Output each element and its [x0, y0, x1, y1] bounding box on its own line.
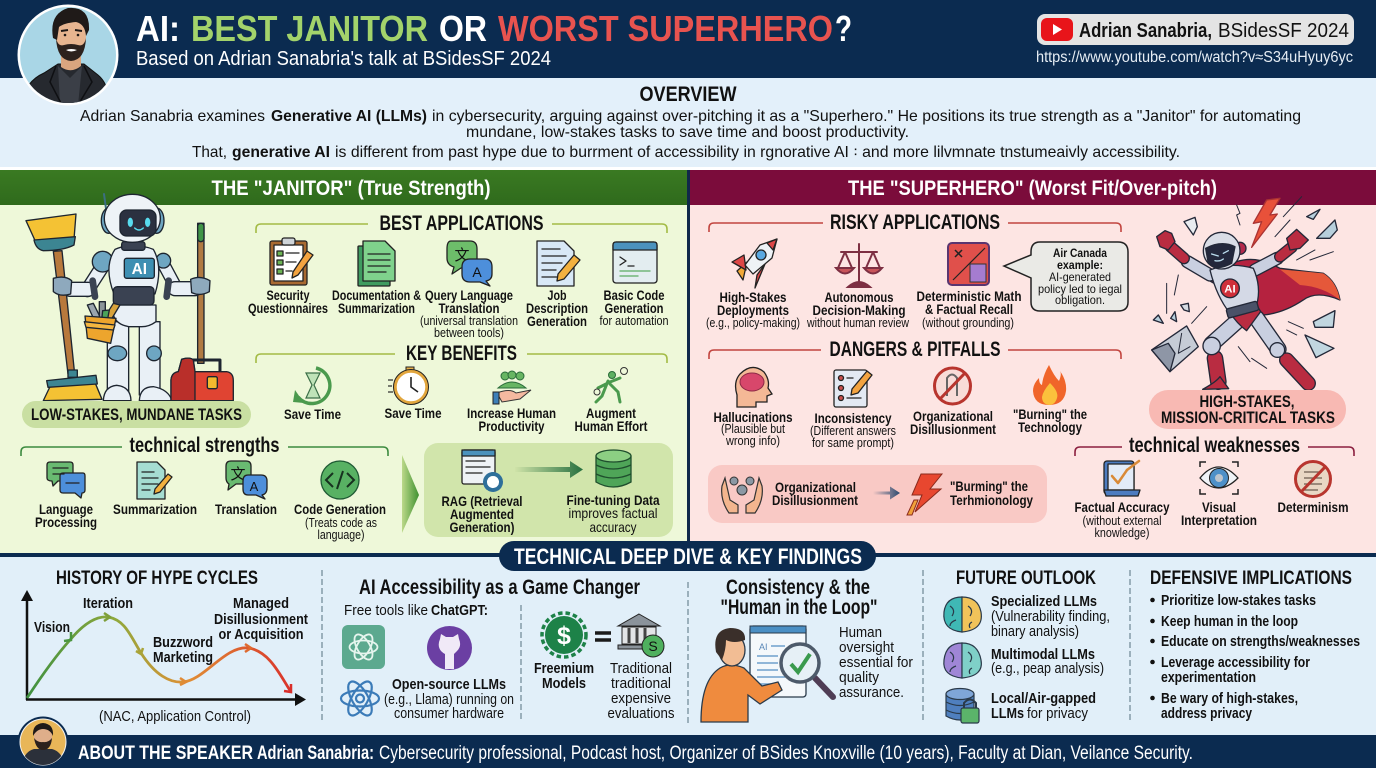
text: traditional evaluations: Traditional	[610, 660, 672, 677]
footer: about the speaker: Adrian Sanabria:	[257, 743, 374, 764]
text: burning terminology: Terhmionology	[950, 492, 1033, 508]
danger: inconsistency: Inconsistency	[814, 410, 892, 426]
item: query language translation: Translation	[438, 300, 500, 316]
panel: superhero	[688, 170, 1376, 555]
weakness: visual interpretation: Interpretation	[1181, 512, 1257, 528]
chart labels: Buzzword	[153, 634, 213, 651]
left and right arms	[53, 251, 210, 297]
superhero header	[688, 170, 1376, 205]
list: defensive implications	[1150, 592, 1360, 722]
mop stick	[198, 223, 204, 363]
item: query language translation: between tools)	[434, 326, 504, 340]
head	[101, 194, 164, 242]
item: documentation: Documentation &	[332, 287, 421, 303]
header band	[0, 0, 1376, 78]
list: defensive implications: experimentation	[1161, 669, 1256, 686]
overview text: Generative AI (LLMs)	[271, 108, 427, 125]
heading: technical weaknesses: technical weaknesses	[1129, 434, 1300, 457]
heading: AI accessibility: AI Accessibility as a Game Changer	[359, 576, 640, 599]
panel: technical deep dive	[0, 553, 1376, 736]
text: multimodal LLMs: Multimodal LLMs	[991, 646, 1095, 663]
text: human oversight: quality	[839, 669, 879, 686]
danger: hallucinations	[714, 367, 793, 448]
benefit: save time stopwatch: Save Time	[384, 405, 442, 421]
text: fine-tuning: Fine-tuning Data	[566, 492, 660, 508]
text: fine-tuning	[566, 492, 660, 535]
benefit: increase human productivity: Productivity	[478, 418, 545, 434]
video url: https://www.youtube.com/watch?v≈S34uHyuy6yc	[1036, 49, 1353, 66]
list: defensive implications: address privacy	[1161, 705, 1253, 722]
text: specialized LLMs: (Vulnerability finding,	[991, 608, 1110, 625]
strength: language processing: Language	[39, 501, 93, 517]
strength: language processing	[35, 462, 97, 530]
avatar: speaker in header	[18, 4, 118, 106]
item: job description generation: Description	[526, 300, 588, 316]
text: local LLMs: Local/Air-gapped	[991, 690, 1096, 707]
text: RAG: Generation)	[450, 519, 514, 535]
icon: chatgpt	[342, 625, 385, 669]
subtitle: Based on Adrian Sanabria's talk at BSidesSF 2024	[136, 48, 551, 70]
column: consistency and human in the loop	[701, 576, 913, 722]
list: defensive implications: Prioritize low-stakes tasks	[1161, 592, 1316, 609]
title: OR	[439, 8, 487, 49]
heading: technical strengths: technical strengths	[130, 434, 280, 457]
overview heading: OVERVIEW	[640, 83, 737, 106]
strength: code generation	[294, 461, 386, 542]
icon: bank with coin	[618, 614, 664, 657]
tag: high-stakes: MISSION-CRITICAL TASKS	[1161, 409, 1335, 427]
item: security questionnaires: Questionnaires	[248, 300, 328, 316]
text: freemium models: Models	[542, 675, 586, 692]
risky: autonomous decision-making	[806, 244, 910, 330]
weakness: factual accuracy: knowledge)	[1094, 526, 1150, 540]
arrow: disillusionment to burning	[873, 486, 900, 500]
limbs	[1157, 229, 1308, 389]
item: basic code generation: for automation	[600, 314, 669, 328]
icon: multimodal brain	[944, 643, 981, 678]
risky: autonomous decision-making: Autonomous	[824, 289, 894, 305]
chart: hype cycle curve	[21, 590, 308, 725]
text: local LLMs: for privacy	[1027, 705, 1088, 722]
text: human oversight: assurance.	[839, 684, 904, 701]
panel: overview	[0, 78, 1376, 167]
chart labels: Disillusionment	[214, 611, 308, 628]
icon: github	[427, 626, 472, 670]
weakness: factual accuracy: Factual Accuracy	[1074, 499, 1170, 515]
heading: future outlook: FUTURE OUTLOOK	[956, 568, 1096, 589]
footer: about the speaker: Cybersecurity professional, Podcast host, Organizer of BSides Knoxville (10 years), Faculty at Dian, Veilance Security.	[379, 743, 1193, 764]
title: BEST JANITOR	[191, 8, 428, 49]
item: documentation: Summarization	[338, 300, 415, 316]
overview text: Adrian Sanabria examines	[80, 108, 265, 125]
weakness: determinism	[1278, 462, 1348, 515]
list: defensive implications: Be wary of high-stakes,	[1161, 690, 1298, 707]
torso	[1210, 265, 1261, 331]
heading: consistency: Consistency & the	[726, 576, 870, 599]
callout: air canada: AI-generated	[1049, 270, 1111, 284]
icon: hands and gears	[722, 477, 762, 513]
overview text	[80, 108, 1301, 161]
icon: database with lock	[946, 688, 979, 723]
text: traditional evaluations: evaluations	[608, 705, 674, 722]
text: free tools	[344, 602, 488, 619]
text: fine-tuning: accuracy	[590, 519, 636, 535]
heading: key benefits	[256, 342, 667, 365]
callout: air canada: policy led to iegal	[1038, 282, 1122, 296]
item: job description generation: Job	[548, 287, 566, 303]
callout: air canada: example:	[1057, 258, 1103, 272]
text: RAG	[442, 493, 522, 535]
risky: deterministic math: (without grounding)	[922, 316, 1014, 330]
item: job description generation: Generation	[527, 313, 587, 329]
heading: dangers	[709, 338, 1121, 361]
text: human oversight: oversight	[839, 639, 895, 656]
risky: autonomous decision-making: without human review	[806, 316, 910, 330]
heading: best applications: BEST APPLICATIONS	[380, 212, 544, 235]
text: burning terminology: "Burming" the	[950, 478, 1028, 494]
strength: code generation: (Treats code as	[305, 516, 377, 530]
danger: inconsistency	[810, 370, 896, 450]
risky: deterministic math	[916, 243, 1022, 330]
equals sign	[595, 633, 611, 640]
banner: technical deep dive: TECHNICAL DEEP DIVE & KEY FINDINGS	[514, 544, 862, 569]
heading: best applications	[256, 212, 667, 235]
icon: freemium badge: $	[557, 622, 571, 650]
danger: hallucinations: (Plausible but	[721, 422, 785, 436]
danger: burning technology: "Burning" the	[1013, 406, 1087, 422]
title	[136, 8, 852, 49]
chart labels	[34, 595, 308, 725]
footer: about the speaker: ABOUT THE SPEAKER	[78, 743, 253, 764]
illustration: human reviewing AI output: AI	[759, 642, 768, 652]
strength: translation	[215, 461, 277, 517]
column dividers	[322, 570, 1130, 723]
danger: burning technology: Technology	[1018, 419, 1082, 435]
overview text: is different from past hype due to burrment of accessibility in rgnorative AI ꞉ and more lilvmnate tnstumeaivly accessibility.	[335, 144, 1180, 161]
benefit: save time hourglass	[284, 368, 341, 422]
item: documentation	[332, 241, 421, 316]
text: local LLMs	[991, 690, 1096, 722]
list: defensive implications: Keep human in the loop	[1161, 613, 1298, 630]
text: organizational disillusionment: Organizational	[775, 479, 856, 495]
text: free tools: Free tools like	[344, 602, 428, 619]
head	[1203, 232, 1246, 269]
illustration: superhero robot	[1152, 197, 1340, 389]
danger: organizational disillusionment: Disillusionment	[910, 421, 996, 437]
overview text: mundane, low-stakes tasks to save time and boost productivity.	[466, 124, 909, 141]
item: security questionnaires	[248, 238, 328, 316]
benefit: save time stopwatch	[384, 367, 442, 421]
item: query language translation: (universal translation	[420, 314, 518, 328]
janitor header: THE "JANITOR" (True Strength)	[212, 177, 490, 200]
benefit: augment human effort: Human Effort	[574, 418, 648, 434]
danger: hallucinations: Hallucinations	[714, 409, 793, 425]
callout: air canada: obligation.	[1055, 293, 1105, 307]
video link badge: BSidesSF 2024	[1218, 20, 1349, 42]
tool pouch	[84, 302, 120, 343]
risky: high-stakes deployments: Deployments	[717, 302, 789, 318]
icon: database	[596, 450, 631, 487]
weakness: visual interpretation	[1181, 462, 1257, 528]
list: defensive implications: Leverage accessibility for	[1161, 654, 1310, 671]
text: specialized LLMs: binary analysis)	[991, 623, 1079, 640]
panel: disillusionment flow	[708, 465, 1047, 523]
danger: inconsistency: (Different answers	[810, 424, 896, 438]
superhero header: THE "SUPERHERO" (Worst Fit/Over-pitch)	[848, 177, 1217, 200]
danger: inconsistency: for same prompt)	[812, 436, 894, 450]
icon: lightning bolt	[907, 474, 942, 515]
text: free tools: ChatGPT:	[431, 602, 488, 619]
section: key benefits	[256, 342, 667, 434]
text: RAG: RAG (Retrieval	[442, 493, 522, 509]
item: query language translation: 文	[454, 244, 470, 265]
panel: janitor	[0, 170, 688, 555]
callout: air canada	[1004, 242, 1128, 311]
strength: summarization: Summarization	[113, 501, 197, 517]
banner: technical deep dive	[499, 541, 876, 571]
torso: AI	[132, 261, 147, 278]
icon: RAG window	[462, 450, 501, 490]
illustration: human reviewing AI output	[701, 626, 833, 722]
chart labels: Vision	[34, 619, 70, 636]
column: history of hype cycles	[21, 568, 308, 725]
legs	[103, 305, 172, 401]
avatar: speaker in footer	[18, 716, 68, 768]
text: open-source LLMs	[384, 676, 514, 722]
heading: risky applications	[709, 211, 1121, 234]
text: traditional evaluations: traditional	[611, 675, 671, 692]
risky: high-stakes deployments	[706, 239, 800, 330]
item: query language translation	[420, 241, 518, 340]
risky: deterministic math: Deterministic Math	[916, 288, 1022, 304]
text: organizational disillusionment	[772, 479, 858, 508]
icon: atom	[341, 678, 379, 719]
heading: key benefits: KEY BENEFITS	[406, 342, 517, 365]
chart labels: Managed	[233, 595, 289, 612]
text: RAG: Augmented	[450, 506, 514, 522]
chart labels: Marketing	[153, 649, 213, 666]
strength: translation: Translation	[215, 501, 277, 517]
strength: code generation: Code Generation	[294, 501, 386, 517]
tag: high-stakes	[1149, 390, 1346, 429]
text: local LLMs: LLMs	[991, 705, 1024, 722]
item: query language translation: Query Language	[425, 287, 513, 303]
cape	[1208, 259, 1340, 315]
janitor header	[0, 170, 688, 205]
risky: high-stakes deployments: (e.g., policy-making)	[706, 316, 800, 330]
heading: consistency: "Human in the Loop"	[720, 596, 878, 619]
toolbox	[171, 358, 233, 401]
section: best applications	[248, 212, 669, 340]
heading: risky applications: RISKY APPLICATIONS	[830, 211, 1000, 234]
icon: bank with coin: S	[648, 638, 658, 654]
text: specialized LLMs: Specialized LLMs	[991, 593, 1097, 610]
callout: air canada: Air Canada	[1053, 246, 1107, 260]
weakness: visual interpretation: Visual	[1202, 499, 1236, 515]
strength: translation: A	[250, 479, 259, 494]
text: open-source LLMs: Open-source LLMs	[392, 676, 506, 693]
strength: code generation: language)	[318, 528, 364, 542]
overview text: in cybersecurity, arguing against over-pitching it as a "Superhero." He positions its true strength as a "Janitor" for automating	[432, 108, 1301, 125]
section: technical weaknesses	[1074, 434, 1354, 540]
item: basic code generation	[600, 242, 669, 328]
weakness: factual accuracy: (without external	[1082, 514, 1162, 528]
title: AI:	[136, 8, 180, 49]
text: organizational disillusionment: Disillusionment	[772, 492, 858, 508]
heading: technical strengths	[21, 434, 388, 457]
text: fine-tuning: improves factual	[568, 505, 658, 521]
text: human oversight	[839, 624, 913, 701]
chart labels: or Acquisition	[218, 626, 304, 643]
center divider	[687, 170, 690, 555]
text: open-source LLMs: (e.g., Llama) running on	[384, 691, 514, 708]
impact effects	[1153, 197, 1337, 368]
item: basic code generation: Generation	[604, 300, 664, 316]
illustration: robot janitor	[26, 194, 233, 401]
danger: organizational disillusionment	[910, 368, 996, 437]
weakness: factual accuracy	[1074, 461, 1170, 540]
benefit: augment human effort: Augment	[586, 405, 636, 421]
text: multimodal LLMs	[991, 646, 1104, 677]
strength: language processing: Processing	[35, 514, 97, 530]
panel: RAG and fine-tuning	[424, 443, 673, 537]
benefit: save time hourglass: Save Time	[284, 406, 341, 422]
section: technical strengths	[21, 434, 388, 542]
video link badge: Adrian Sanabria,	[1079, 20, 1212, 42]
chart labels: Iteration	[83, 595, 133, 612]
overview text: That,	[192, 144, 227, 161]
title: ?	[835, 8, 852, 49]
text: specialized LLMs	[991, 593, 1110, 640]
text: traditional evaluations: expensive	[611, 690, 671, 707]
overview text: generative AI	[232, 144, 330, 161]
chart labels: (NAC, Application Control)	[99, 708, 251, 725]
text: human oversight: essential for	[839, 654, 913, 671]
icon: freemium badge	[542, 613, 586, 657]
text: traditional evaluations	[608, 660, 674, 722]
torso: AI	[1224, 284, 1236, 296]
torso	[109, 242, 159, 305]
text: freemium models: Freemium	[534, 660, 594, 677]
column: AI accessibility	[341, 576, 674, 722]
arrow: strengths to RAG	[402, 455, 419, 533]
tag: high-stakes: HIGH-STAKES,	[1200, 393, 1294, 411]
strength: summarization	[113, 462, 197, 517]
rubble block	[1152, 326, 1198, 372]
column: future outlook	[944, 568, 1110, 723]
risky: high-stakes deployments: High-Stakes	[720, 289, 787, 305]
risky: deterministic math: & Factual Recall	[925, 301, 1013, 317]
tag: low-stakes	[22, 401, 251, 428]
item: security questionnaires: Security	[266, 287, 310, 303]
text: multimodal LLMs: (e.g., peap analysis)	[991, 660, 1104, 677]
danger: hallucinations: wrong info)	[725, 434, 780, 448]
risky: autonomous decision-making: Decision-Making	[812, 302, 906, 318]
weakness: determinism: Determinism	[1278, 499, 1348, 515]
danger: organizational disillusionment: Organizational	[913, 408, 993, 424]
heading: hype cycles: HISTORY OF HYPE CYCLES	[56, 568, 258, 589]
broom	[26, 214, 102, 401]
column: defensive implications	[1150, 568, 1360, 722]
benefit: augment human effort	[574, 368, 648, 434]
text: open-source LLMs: consumer hardware	[394, 705, 504, 722]
text: human oversight: Human	[839, 624, 882, 641]
arrow: RAG to fine-tuning	[515, 461, 583, 478]
heading: consistency	[720, 576, 878, 619]
heading: dangers: DANGERS & PITFALLS	[830, 338, 1000, 361]
footer: about the speaker	[0, 735, 1376, 768]
item: basic code generation: Basic Code	[604, 287, 665, 303]
text: burning terminology	[950, 478, 1033, 508]
danger: burning technology	[1013, 365, 1087, 435]
icon: specialized brain	[944, 597, 981, 632]
benefit: increase human productivity: Increase Human	[467, 405, 556, 421]
item: query language translation: A	[472, 264, 482, 280]
title: WORST SUPERHERO	[498, 8, 833, 49]
item: job description generation	[526, 241, 588, 329]
tag: low-stakes: LOW-STAKES, MUNDANE TASKS	[31, 405, 242, 424]
video link badge	[1037, 14, 1354, 45]
section: risky applications	[706, 211, 1128, 330]
section: dangers and pitfalls	[708, 338, 1121, 523]
text: freemium models	[534, 660, 594, 692]
benefit: increase human productivity	[467, 371, 556, 434]
strength: translation: 文	[230, 463, 246, 484]
